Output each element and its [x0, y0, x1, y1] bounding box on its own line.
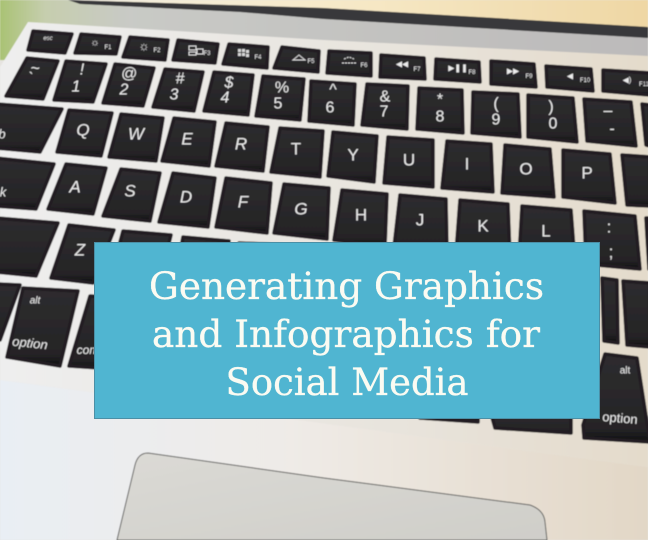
number key row: -	[609, 120, 615, 138]
ASDF key row: S	[124, 182, 136, 200]
ASDF key row: ;	[609, 242, 613, 262]
ASDF key row: G	[294, 200, 308, 218]
screen backdrop above hinge	[0, 0, 648, 60]
ASDF key row: D	[180, 188, 192, 206]
banner panel	[94, 242, 600, 418]
bottom key row: com	[77, 343, 99, 357]
function key row: F2	[153, 48, 161, 54]
function key row: ▶▶	[507, 66, 520, 76]
ASDF key row: :	[607, 218, 611, 236]
number key row: 4	[221, 90, 230, 106]
function key row: F5	[307, 59, 315, 65]
QWERTY key row: I	[465, 154, 469, 174]
number key row	[6, 58, 648, 146]
number key row: 1	[72, 78, 80, 96]
QWERTY key row	[0, 104, 648, 206]
function key row: ◀	[567, 72, 574, 80]
QWERTY key row: R	[235, 134, 247, 154]
function key row: F10	[580, 78, 591, 84]
function key row: F8	[468, 70, 476, 76]
QWERTY key row: T	[291, 140, 301, 158]
QWERTY key row: P	[581, 164, 593, 182]
bottom key row: option	[602, 409, 638, 427]
QWERTY key row: E	[181, 130, 193, 148]
function key row: F6	[360, 63, 368, 69]
number key row: 2	[119, 82, 129, 98]
number key row: 3	[170, 86, 179, 104]
number key row: #	[176, 70, 186, 88]
number key row: )	[548, 98, 554, 116]
function key row: esc	[43, 36, 53, 42]
QWERTY key row: W	[128, 124, 146, 144]
ASDF key row	[0, 158, 648, 269]
number key row: *	[437, 92, 443, 108]
ASDF key row: K	[477, 216, 489, 236]
function key row	[28, 31, 648, 95]
banner title text: Generating Graphics	[149, 265, 544, 308]
warm light above hinge	[68, 0, 648, 30]
number key row: ^	[329, 82, 337, 98]
number key row: 9	[492, 112, 501, 128]
function key row: ☼	[138, 39, 150, 53]
ASDF key row: L	[541, 222, 551, 240]
number key row: $	[224, 74, 235, 92]
function key row: F1	[104, 45, 112, 51]
QWERTY key row: U	[403, 150, 415, 170]
function key row: ▶❚❚	[448, 64, 468, 72]
bottom key row: alt	[620, 366, 631, 376]
QWERTY key row: Q	[76, 120, 90, 140]
ZXCV key row	[0, 218, 648, 347]
palm rest	[0, 380, 648, 540]
number key row: ~	[30, 60, 40, 78]
number key row: 0	[549, 116, 558, 132]
number key row: 8	[436, 108, 445, 126]
title banner	[94, 242, 600, 418]
number key row: &	[380, 88, 391, 106]
ZXCV key row: Z	[74, 240, 86, 260]
function key row: F4	[254, 55, 262, 61]
number key row: 5	[274, 96, 283, 112]
number key row: –	[604, 102, 613, 120]
number key row: @	[121, 66, 137, 82]
bottom key row: alt	[30, 296, 42, 306]
ASDF key row: A	[68, 178, 81, 196]
function key row: ☼	[90, 38, 100, 48]
bottom key row: option	[12, 334, 48, 352]
ASDF key row: H	[355, 206, 367, 224]
banner title text	[149, 265, 544, 404]
ASDF key row: J	[416, 210, 424, 230]
function key row: ◀◀	[396, 60, 409, 68]
number key row: %	[275, 80, 289, 96]
bottom key row	[0, 284, 648, 442]
ASDF key row: F	[238, 192, 250, 212]
banner title text: and Infographics for	[152, 313, 540, 356]
function key row: F7	[413, 67, 421, 73]
trackpad	[117, 453, 547, 540]
number key row: (	[493, 96, 499, 112]
QWERTY key row: Y	[347, 146, 359, 164]
number key row: `	[28, 70, 34, 88]
number key row: 6	[326, 100, 335, 116]
function key row: F3	[203, 51, 211, 57]
number key row: !	[80, 62, 85, 78]
function key row: F9	[525, 74, 533, 80]
hinge	[68, 0, 648, 38]
banner title text: Social Media	[226, 361, 468, 404]
number key row: 7	[380, 104, 389, 120]
QWERTY key row: O	[519, 160, 533, 178]
function key row: ◀)	[623, 76, 632, 84]
